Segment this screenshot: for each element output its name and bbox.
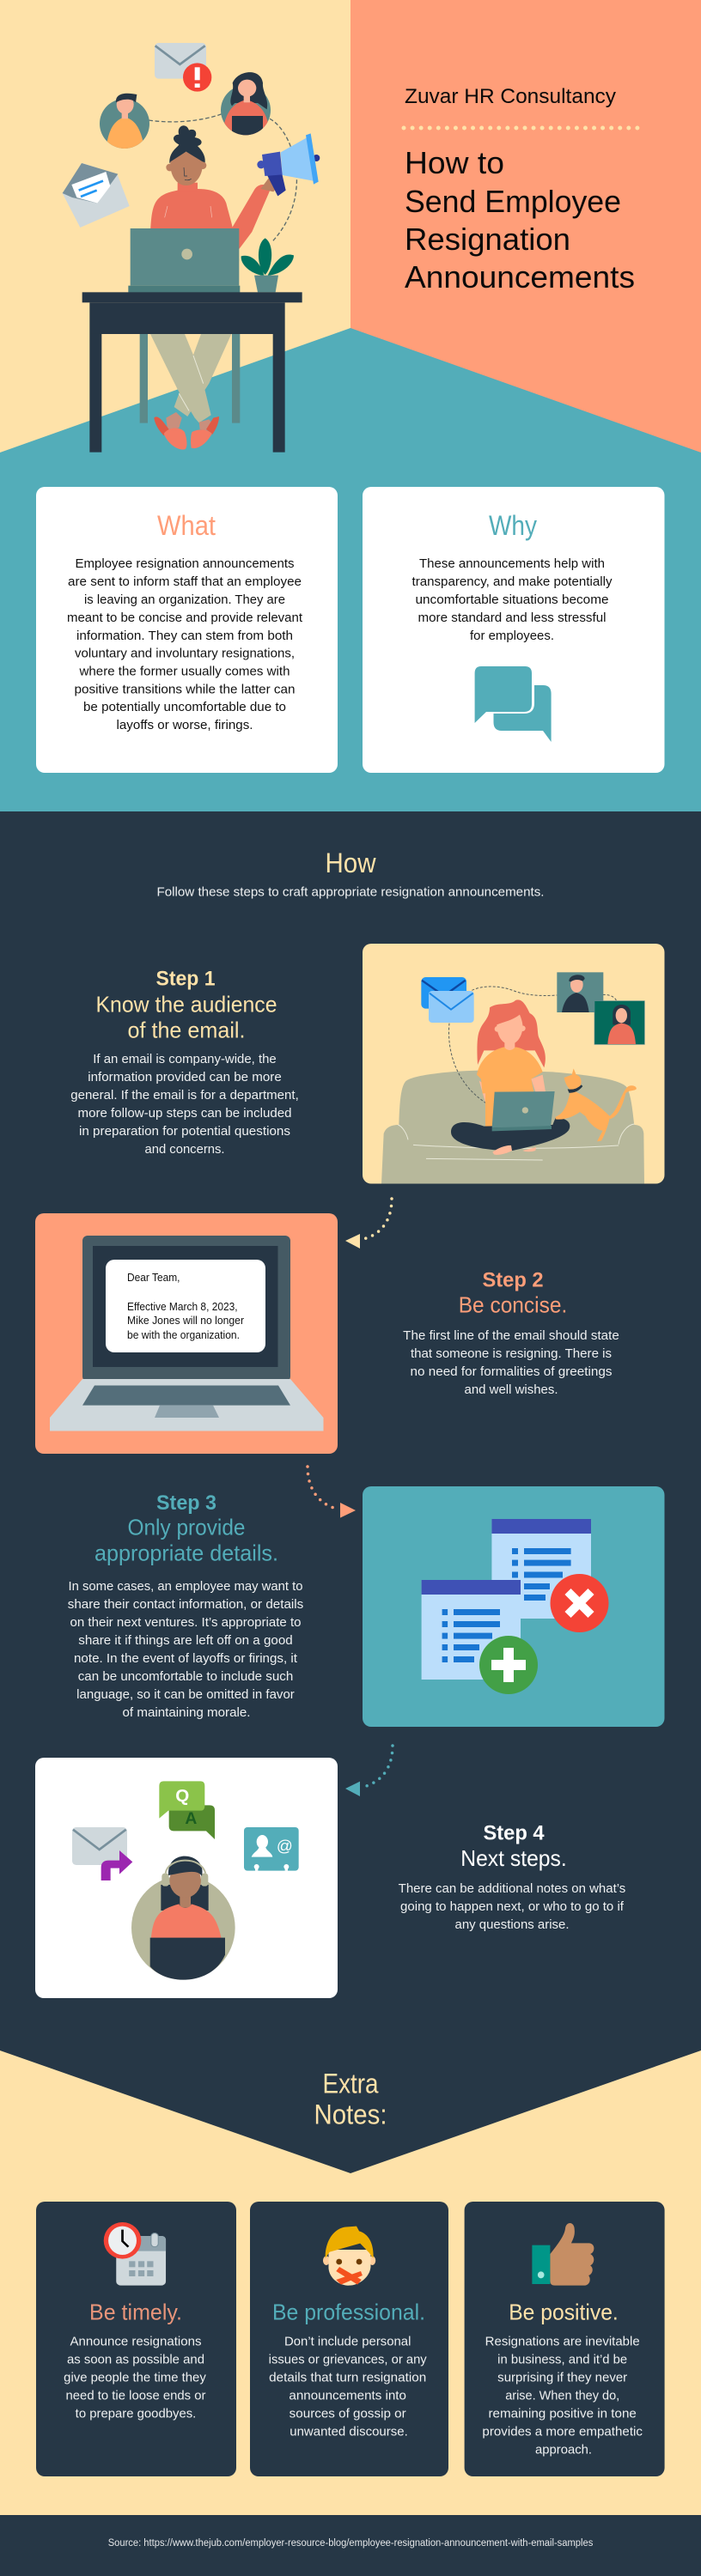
arrow: step 3 to step 4 [345,1746,393,1796]
icon: thumbs up [532,2223,594,2286]
text: what body: meant to be concise and provide relevant [67,611,302,625]
step 2 illustration: laptop with email [35,1213,338,1454]
text: be positive body [482,2335,643,2458]
text: what body: Employee resignation announcements [76,557,294,571]
text: be professional body: unwanted discourse. [290,2426,408,2439]
text: be professional body: details that turn resignation [269,2372,426,2385]
how section background [0,811,701,2052]
step 3 text: can be uncomfortable to include such [78,1670,293,1684]
cat [556,1068,637,1141]
step 3 text: on their next ventures. It’s appropriate to [70,1616,301,1630]
woman on sofa [451,999,570,1155]
text: be timely body: Announce resignations [70,2335,201,2348]
footer: Source: https://www.thejub.com/employer-resource-blog/employee-resignation-announcement-with-email-samples [108,2538,594,2549]
header background [0,0,701,811]
text: why body: transparency, and make potentially [412,575,613,589]
icon: face with taped mouth [323,2227,375,2286]
text: be timely body: need to tie loose ends or [65,2390,206,2403]
text: what body: positive transitions while the latter can [74,683,296,697]
text: be professional body [269,2335,427,2439]
text: what body: be potentially uncomfortable due to [83,701,286,714]
heading: be timely: Be timely. [89,2300,182,2325]
photo: woman [594,1001,644,1044]
step 3 text: appropriate details. [94,1540,278,1566]
step 3 illustration: documents [363,1486,665,1727]
step 2 text: Be concise. [459,1291,567,1317]
title: Announcements [405,259,635,295]
text: be professional body: issues or grievances, or any [269,2354,427,2367]
arrow: step 1 to step 2 [345,1199,392,1249]
step 3 text: In some cases, an employee may want to [69,1580,302,1594]
step 1 text: If an email is company-wide, the [93,1053,277,1066]
step 3 text: note. In the event of layoffs or firings, it [74,1652,297,1666]
icon: contact card: @ [277,1837,293,1855]
icon: open envelope [63,163,130,228]
email message: Effective March 8, 2023, [127,1300,238,1313]
extra notes background [0,2049,701,2515]
text: what body [67,557,302,732]
icon: chat bubbles [475,666,552,742]
email message: Dear Team, [127,1271,180,1284]
step 4 text: any questions arise. [455,1918,569,1932]
step 4 text: going to happen next, or who to go to if [400,1900,625,1914]
step 3 text [68,1492,303,1720]
text: be positive body: provides a more empathetic [482,2426,643,2439]
icon: contact card [244,1827,299,1871]
step 1 illustration [363,944,665,1184]
text: be positive body: approach. [535,2444,592,2458]
dotted divider [404,125,637,131]
step 3 text: share their contact information, or details [68,1598,303,1612]
step 1 text: general. If the email is for a department, [70,1089,299,1103]
text: be professional body: Don’t include personal [284,2335,411,2348]
step 3 text: share it if things are left off on a good [78,1634,293,1648]
text: be timely body: give people the time they [64,2372,207,2385]
icon: clock and calendar [104,2222,166,2286]
step 4 illustration [35,1758,338,1998]
woman upper body [150,125,271,249]
icon: forward email [72,1827,132,1880]
text: be positive body: in business, and it’d be [497,2354,627,2367]
how heading: Follow these steps to craft appropriate resignation announcements. [156,886,545,900]
text: be timely body: to prepare goodbyes. [76,2408,196,2421]
panel: be positive [465,2202,665,2476]
desk and legs [82,292,302,453]
step 1 text: information provided can be more [88,1071,282,1084]
icon: q and a bubbles: Q [175,1786,189,1806]
step 2 text: no need for formalities of greetings [411,1365,612,1379]
text: be professional body: announcements into [289,2390,406,2403]
extra notes heading: Notes: [314,2099,387,2129]
text: why body: These announcements help with [419,557,605,571]
text: be professional body: sources of gossip or [290,2408,406,2421]
text: what body: layoffs or worse, firings. [117,719,253,732]
step 2 text: The first line of the email should state [403,1329,619,1343]
hero illustration: woman at desk [63,43,320,453]
text: what body: are sent to inform staff that an employee [68,575,302,589]
step 1 text: Know the audience [96,992,277,1018]
icon: q and a bubbles: A [185,1810,197,1828]
text: what body: where the former usually comes with [78,665,290,678]
person with headset [131,1856,235,1980]
email message [106,1260,265,1352]
step 1 text: in preparation for potential questions [79,1125,290,1139]
panel: be timely [36,2202,236,2476]
how heading [156,848,545,900]
heading: be professional: Be professional. [272,2300,425,2325]
title: Send Employee [405,184,621,219]
email message: Mike Jones will no longer [127,1314,245,1327]
icon: blue envelopes [421,977,474,1023]
text: why body: more standard and less stressful [418,611,607,625]
sofa [381,1071,644,1184]
step 3 text: of maintaining morale. [122,1706,251,1720]
avatar: woman [221,72,271,137]
dashed connector lines [149,114,296,242]
heading: be positive: Be positive. [509,2300,619,2325]
panel: what [36,487,338,773]
extra notes heading [314,2068,387,2129]
step 1 text: and concerns. [144,1143,225,1157]
document: add [422,1580,538,1694]
plant [241,238,294,292]
text: be positive body: surprising if they never [497,2372,627,2385]
step 2 text: Step 2 [483,1269,543,1292]
step 1 text: Step 1 [156,967,215,991]
step 2 text: that someone is resigning. There is [411,1347,612,1361]
icon: envelope with alert [155,43,211,92]
step 4 text [399,1822,625,1932]
text: why body: for employees. [470,629,554,643]
footer [0,2515,701,2576]
step 4 text: Next steps. [460,1845,567,1871]
text: what body: is leaving an organization. They are [84,593,285,607]
title: How to [405,145,504,180]
step 3 text: Only provide [127,1515,246,1540]
text: why body: uncomfortable situations become [416,593,608,607]
title [405,145,635,295]
step 1 text: more follow-up steps can be included [77,1107,292,1121]
step 3 text: Step 3 [156,1492,216,1515]
avatar: man [100,94,149,149]
step 4 text: There can be additional notes on what’s [399,1882,625,1896]
arrow: step 2 to step 3 [308,1467,356,1518]
text: why body [412,557,613,643]
dashed connector lines [449,987,616,1108]
step 2 text: and well wishes. [464,1383,558,1397]
how heading: How [325,848,376,878]
photo: man [557,972,603,1012]
text: what body: information. They can stem from both [76,629,293,643]
email message: be with the organization. [127,1328,240,1341]
step 3 text: language, so it can be omitted in favor [76,1688,295,1702]
panel: be professional [250,2202,448,2476]
company name: Zuvar HR Consultancy [405,85,616,108]
panel: why [363,487,665,773]
step 2 text [403,1269,619,1397]
step 1 text [70,967,299,1157]
text: be positive body: Resignations are inevitable [485,2335,640,2348]
text: be positive body: remaining positive in tone [488,2408,637,2421]
document: remove [491,1519,608,1632]
extra notes heading: Extra [323,2068,379,2099]
step 1 text: of the email. [127,1018,246,1043]
laptop [128,228,240,293]
icon: q and a bubbles [159,1781,215,1839]
text: be timely body [64,2335,207,2421]
icon: megaphone [257,133,320,196]
heading: why: Why [489,510,537,541]
text: be positive body: arise. When they do, [505,2390,619,2403]
text: be timely body: as soon as possible and [67,2354,204,2367]
text: what body: voluntary and involuntary resignations, [75,647,295,661]
heading: what: What [157,510,216,541]
step 4 text: Step 4 [483,1822,545,1845]
title: Resignation [405,222,570,257]
